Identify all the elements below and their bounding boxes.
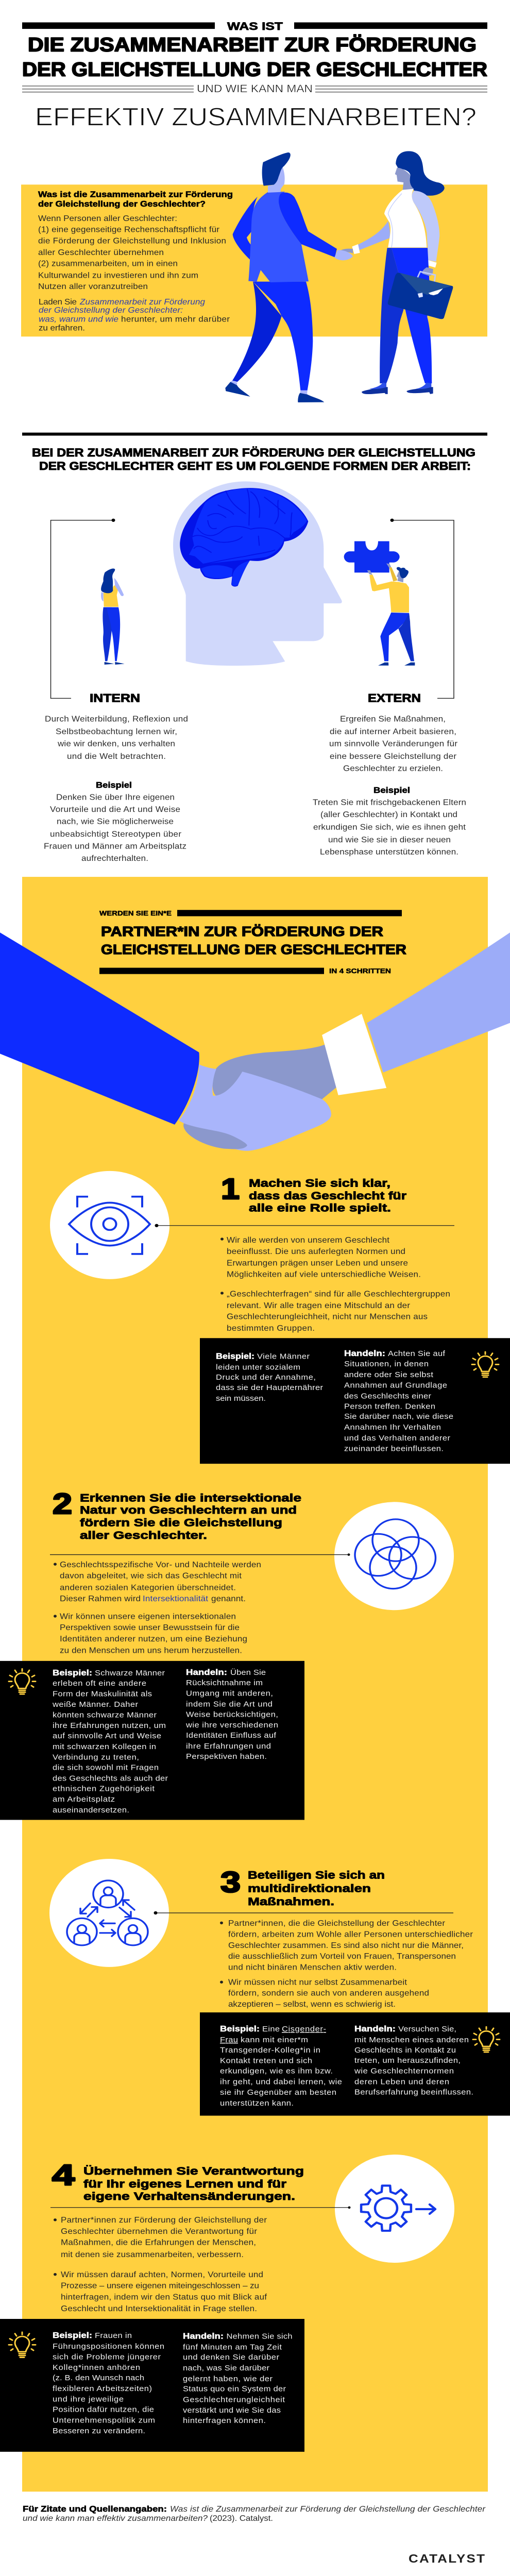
section heading: forms of work: DER GESCHLECHTER GEHT ES UM FOLGENDE FORMEN DER ARBEIT: — [39, 460, 471, 473]
step 3 heading: Beteiligen Sie sich an — [248, 1868, 385, 1881]
example text: Beispiel: — [220, 2025, 260, 2033]
extern example: und wie Sie sie in dieser neuen — [328, 836, 451, 844]
step 1 example box — [200, 1338, 510, 1464]
step 4 bullets — [54, 2216, 267, 2313]
action text: hinterfragen können. — [183, 2417, 266, 2425]
definition text: Wenn Personen aller Geschlechter: — [38, 214, 177, 223]
action text: ihre Erfahrungen und — [186, 1742, 271, 1751]
icon: eye in circle — [50, 1171, 169, 1279]
example text: Beispiel: — [53, 2331, 92, 2340]
example text: Form der Maskulinität als — [53, 1690, 152, 1698]
definition text — [38, 214, 226, 291]
icon: light bulb — [9, 2332, 36, 2358]
action text: Achten Sie auf — [388, 1350, 446, 1358]
example text: und ihre jeweilige — [53, 2395, 124, 2403]
example text: unterstützen kann. — [220, 2099, 294, 2108]
step 3 bullets: fördern, arbeiten zum Wohle aller Personen unterschiedlicher — [228, 1930, 473, 1939]
step 2 bullets: Dieser Rahmen wird — [60, 1595, 141, 1603]
example text: Beispiel: — [216, 1352, 254, 1361]
action text — [344, 1349, 453, 1453]
step 1 — [50, 1171, 510, 1464]
action text: Üben Sie — [230, 1668, 266, 1677]
title connector: und wie kann man: UND WIE KANN MAN — [197, 82, 313, 95]
step 3 example box — [200, 2012, 510, 2115]
definition text: (1) eine gegenseitige Rechenschaftspflicht für — [38, 225, 220, 234]
action text: gelernt haben, wie der — [183, 2375, 273, 2383]
example text: Schwarze Männer — [95, 1669, 165, 1677]
example text: mit schwarzen Kollegen in — [53, 1743, 156, 1751]
definition heading — [38, 190, 233, 209]
step 4 bullets: Partner*innen zur Förderung der Gleichstellung der — [61, 2216, 267, 2225]
citation: (2023). Catalyst. — [210, 2514, 273, 2523]
example text: ihre Erfahrungen nutzen, um — [53, 1722, 166, 1730]
action text: Handeln: — [354, 2025, 396, 2033]
step 4 bullets: Geschlechter übernehmen die Verantwortung für — [61, 2227, 258, 2236]
section heading: forms of work — [32, 446, 475, 473]
action text: und denken Sie darüber — [183, 2353, 279, 2362]
figure — [367, 563, 415, 666]
step 3 bullets: die ausschließlich zum Vorteil von Frauen, Transpersonen — [228, 1952, 456, 1961]
example text: sich die Probleme jüngerer — [53, 2353, 161, 2361]
action text: mit Menschen eines anderen — [354, 2036, 469, 2044]
example text: ethnischen Zugehörigkeit — [53, 1785, 155, 1793]
action text: des Geschlechts einer — [344, 1392, 431, 1400]
intern text: wie wir denken, uns verhalten — [57, 739, 175, 748]
example text: Viele Männer — [257, 1352, 310, 1361]
example text: könnten schwarze Männer — [53, 1711, 157, 1719]
action text: Versuchen Sie, — [398, 2025, 456, 2033]
illustration: head with brain — [173, 481, 342, 666]
action text: Status quo ein System der — [183, 2385, 286, 2393]
example text — [216, 1352, 323, 1403]
step 3 — [49, 1859, 510, 2115]
partner heading: GLEICHSTELLUNG DER GESCHLECHTER — [101, 942, 406, 958]
action text: Identitäten Einfluss auf — [186, 1732, 277, 1740]
example text: erleben oft eine andere — [53, 1679, 146, 1688]
example text: ihr geht, und dabei lernen, wie — [220, 2078, 342, 2086]
column: extern — [313, 692, 466, 856]
citation: und wie kann man effektiv zusammenarbeiten? — [23, 2514, 208, 2523]
step 4 bullets: Prozesse – unsere eigenen miteingeschlossen – zu — [61, 2281, 259, 2291]
example text: auseinandersetzen. — [53, 1806, 129, 1815]
action text: nach, was Sie darüber — [183, 2364, 269, 2372]
step 3 heading: multidirektionalen — [248, 1882, 371, 1894]
download note: herunter, um mehr darüber — [121, 315, 230, 324]
step 3 bullets: fördern, sondern sie auch von anderen ausgehend — [228, 1989, 429, 1997]
illustration: man lifting puzzle piece — [344, 541, 415, 666]
step 2 bullets: zu den Menschen um uns herum herzustellen. — [60, 1646, 242, 1655]
panel: four steps background — [22, 877, 488, 2492]
section heading: forms of work: BEI DER ZUSAMMENARBEIT ZUR FÖRDERUNG DER GLEICHSTELLUNG — [32, 446, 475, 460]
example text: auf sinnvolle Art und Weise — [53, 1732, 161, 1740]
brain — [180, 488, 308, 587]
example text: (z. B. den Wunsch nach — [53, 2374, 144, 2382]
action text — [354, 2025, 473, 2096]
intern text: und die Welt betrachten. — [67, 752, 166, 761]
example text: Position dafür nutzen, die — [53, 2405, 154, 2414]
extern text: um sinnvolle Veränderungen für — [329, 739, 458, 748]
step 2 bullets: Wir können unsere eigenen intersektionalen — [60, 1612, 236, 1621]
action text: Handeln: — [183, 2332, 224, 2341]
icon: gear with arrow — [335, 2155, 454, 2263]
definition text: (2) zusammenarbeiten, um in einen — [38, 259, 178, 268]
step 2 — [0, 1487, 454, 1820]
citation — [23, 2505, 486, 2523]
action text: Berufserfahrung beeinflussen. — [354, 2088, 473, 2096]
step 1 bullets: bestimmten Gruppen. — [227, 1324, 315, 1333]
step 2 bullets: davon abgeleitet, wie sich das Geschlecht mit — [60, 1571, 242, 1580]
example text: Kolleg*innen anhören — [53, 2364, 140, 2372]
step 2 heading — [80, 1491, 301, 1541]
example text — [53, 2331, 164, 2435]
extern example: (aller Geschlechter) in Kontakt und — [320, 810, 457, 819]
step 1 heading: Machen Sie sich klar, — [249, 1177, 390, 1189]
example text: Transgender-Kolleg*in in — [220, 2046, 320, 2055]
action text: indem Sie die Art und — [186, 1700, 273, 1708]
definition text: die Förderung der Gleichstellung und Inklusion — [38, 236, 226, 245]
step 1 heading — [249, 1177, 406, 1214]
extern example — [313, 786, 466, 856]
step 2 bullets: genannt. — [211, 1595, 246, 1603]
step 4 bullets: mit denen sie zusammenarbeiten, verbessern. — [61, 2250, 244, 2259]
action text: deren Leben und deren — [354, 2078, 449, 2086]
step 4 heading — [83, 2164, 304, 2202]
step 2 heading: Erkennen Sie die intersektionale — [80, 1491, 301, 1504]
action text: Annahmen auf Grundlage — [344, 1381, 447, 1389]
bracket: extern — [390, 519, 454, 698]
step 4 example box — [0, 2319, 304, 2452]
step 4 bullets: Maßnahmen, die die Erfahrungen der Menschen, — [61, 2238, 256, 2247]
step 2 bullets: Geschlechtsspezifische Vor- und Nachteile werden — [60, 1561, 261, 1569]
step 1 bullets: beeinflusst. Die uns auferlegten Normen und — [227, 1247, 405, 1256]
example text: weiße Männer. Daher — [52, 1701, 138, 1709]
partner heading: IN 4 SCHRITTEN — [329, 967, 391, 975]
step 1 heading: dass das Geschlecht für — [249, 1189, 406, 1202]
action text: andere oder Sie selbst — [344, 1370, 434, 1379]
intern example — [44, 781, 186, 863]
title line 3: EFFEKTIV ZUSAMMENARBEITEN? — [35, 103, 477, 131]
example text: sie ihr Gegenüber am besten — [220, 2089, 336, 2097]
action text: Umgang mit anderen, — [186, 1689, 273, 1698]
step 3 bullets: und nicht binären Menschen aktiv werden. — [228, 1963, 397, 1972]
step 1 bullets: relevant. Wir alle tragen eine Mitschuld an der — [227, 1301, 411, 1310]
extern example: Beispiel — [373, 786, 410, 795]
action text: Perspektiven haben. — [186, 1753, 267, 1761]
bracket: intern — [50, 519, 115, 698]
icon: overlapping circles — [334, 1502, 454, 1610]
step number 3: 3 — [220, 1866, 241, 1899]
intern text: Selbstbeobachtung lernen wir, — [56, 727, 177, 736]
action text: Annahmen Ihr Verhalten — [344, 1423, 441, 1432]
step 1 bullets: Erwartungen prägen unser Leben und unsere — [227, 1259, 408, 1267]
citation: Für Zitate und Quellenangaben: — [23, 2505, 167, 2514]
partner heading: WERDEN SIE EIN*E — [99, 909, 172, 917]
extern example: Treten Sie mit frischgebackenen Eltern — [313, 798, 466, 807]
extern text: Geschlechter zu erzielen. — [343, 764, 443, 773]
step 2 heading: aller Geschlechter. — [80, 1529, 207, 1541]
definition heading: der Gleichstellung der Geschlechter? — [38, 199, 206, 209]
step 4 bullets: hinterfragen, indem wir den Status quo mit Blick auf — [61, 2293, 267, 2301]
extern text: Ergreifen Sie Maßnahmen, — [340, 715, 446, 723]
example text: Frau — [220, 2036, 238, 2044]
icon: three people with arrows — [49, 1859, 169, 1967]
divider rule — [22, 433, 487, 436]
intern text — [45, 715, 188, 761]
action text — [185, 1668, 278, 1761]
step 1 bullets: „Geschlechterfragen“ sind für alle Geschlechtergruppen — [227, 1290, 450, 1298]
definition text: Nutzen aller voranzutreiben — [38, 282, 148, 291]
step number 4: 4 — [52, 2159, 75, 2191]
action text: Rücksichtnahme im — [186, 1679, 263, 1687]
step 3 bullets — [220, 1919, 473, 2009]
definition heading: Was ist die Zusammenarbeit zur Förderung — [38, 190, 233, 199]
example text: Führungspositionen können — [53, 2343, 164, 2351]
man — [225, 152, 353, 402]
step 4 heading: für Ihr eigenes Lernen und für — [83, 2177, 286, 2190]
step 2 bullets: Intersektionalität — [143, 1595, 209, 1603]
download note: Laden Sie — [39, 298, 77, 307]
action text: wie Geschlechternormen — [354, 2067, 454, 2075]
action text: Handeln: — [344, 1349, 385, 1358]
intern text: Durch Weiterbildung, Reflexion und — [45, 715, 188, 723]
example text: Eine — [262, 2025, 280, 2033]
intern heading: INTERN — [90, 692, 140, 705]
download note: der Gleichstellung der Geschlechter: — [39, 306, 183, 315]
step 1 bullets — [220, 1236, 450, 1333]
step 2 heading: Natur von Geschlechtern an und — [80, 1503, 297, 1516]
step 4 — [0, 2155, 454, 2452]
example text: flexibleren Arbeitszeiten) — [53, 2384, 152, 2393]
example text: sein müssen. — [216, 1395, 266, 1403]
step 1 bullets: Wir alle werden von unserem Geschlecht — [227, 1236, 390, 1245]
connector line — [154, 1911, 453, 1914]
action text: und das Verhalten anderer — [344, 1434, 450, 1443]
partner heading — [99, 909, 406, 975]
step 1 heading: alle eine Rolle spielt. — [249, 1201, 391, 1214]
action text: zueinander beeinflussen. — [344, 1445, 444, 1453]
extern example: erkundigen Sie sich, wie es ihnen geht — [313, 823, 466, 832]
intern example: unbeabsichtigt Stereotypen über — [50, 830, 182, 839]
example text: leiden unter sozialem — [216, 1363, 300, 1371]
panel: definition — [21, 184, 487, 336]
icon: light bulb — [472, 1352, 499, 1377]
step 2 bullets: Identitäten anderer nutzen, um eine Beziehung — [60, 1635, 247, 1643]
intern example: aufrechterhalten. — [81, 854, 148, 863]
briefcase — [388, 272, 453, 319]
example text: dass sie der Haupternährer — [216, 1384, 323, 1392]
example text: Beispiel: — [53, 1669, 92, 1677]
extern text — [329, 715, 458, 773]
logo: catalyst: CATALYST — [409, 2552, 485, 2565]
action text: Geschlechterungleichheit — [183, 2396, 285, 2404]
step 4 heading: Übernehmen Sie Verantwortung — [83, 2164, 304, 2177]
column: intern — [44, 692, 188, 863]
step 2 bullets: anderen sozialen Kategorien überschneidet. — [60, 1583, 236, 1592]
citation: Was ist die Zusammenarbeit zur Förderung der Gleichstellung der Geschlechter — [170, 2505, 486, 2514]
action text: Person treffen. Denken — [344, 1402, 435, 1411]
title line 2: DER GLEICHSTELLUNG DER GESCHLECHTER — [22, 59, 487, 80]
step 4 bullets: Geschlecht und Intersektionalität in Frage stellen. — [61, 2304, 257, 2313]
step 1 bullets: Möglichkeiten auf viele unterschiedliche Weisen. — [227, 1270, 421, 1279]
action text: verstärkt und wie Sie das — [183, 2406, 281, 2415]
example text: Besseren zu verändern. — [53, 2427, 145, 2435]
action text: wie ihre verschiedenen — [185, 1721, 278, 1730]
title block — [22, 20, 487, 131]
example text: kann mit einer*m — [241, 2036, 308, 2044]
download note: Zusammenarbeit zur Förderung — [79, 298, 205, 307]
step 2 example box — [0, 1661, 304, 1820]
title line 1: DIE ZUSAMMENARBEIT ZUR FÖRDERUNG — [28, 33, 477, 56]
step 3 heading: Maßnahmen. — [248, 1895, 334, 1908]
action text: fünf Minuten am Tag Zeit — [183, 2343, 282, 2351]
step 3 bullets: Wir müssen nicht nur selbst Zusammenarbeit — [228, 1978, 407, 1987]
connector line — [155, 1224, 454, 1227]
step 4 heading: eigene Verhaltensänderungen. — [83, 2190, 295, 2202]
example text: Frauen in — [95, 2332, 132, 2340]
download note — [39, 298, 230, 332]
action text: Geschlechts in Kontakt zu — [354, 2046, 456, 2055]
example text: erkundigen, wie es ihm bzw. — [220, 2067, 333, 2075]
step 2 heading: fördern Sie die Gleichstellung — [80, 1516, 282, 1529]
example text: Druck und der Annahme, — [216, 1374, 316, 1382]
connector line — [50, 2206, 350, 2209]
example text: die sich sowohl mit Fragen — [53, 1764, 159, 1772]
illustration: large handshake — [0, 933, 510, 1151]
extern heading: EXTERN — [368, 692, 421, 705]
title kicker: was ist: WAS IST — [227, 20, 283, 32]
step number 2: 2 — [53, 1487, 72, 1520]
step 3 bullets: Geschlechter zusammen. Es sind also nicht nur die Männer, — [228, 1941, 464, 1950]
example text: am Arbeitsplatz — [53, 1795, 115, 1804]
definition text: aller Geschlechter übernehmen — [38, 248, 164, 257]
step 4 bullets: Wir müssen darauf achten, Normen, Vorurteile und — [61, 2270, 263, 2279]
extern example: Lebensphase unterstützen können. — [320, 848, 458, 856]
icon: light bulb — [9, 1669, 36, 1694]
icon: light bulb — [473, 2027, 500, 2052]
example text — [52, 1669, 168, 1815]
action text: Nehmen Sie sich — [227, 2332, 293, 2341]
action text: treten, um herauszufinden, — [354, 2056, 461, 2065]
illustration: two people shaking hands — [225, 151, 453, 402]
intern example: Denken Sie über Ihre eigenen — [56, 793, 175, 802]
action text: Weise berücksichtigen, — [186, 1710, 278, 1719]
action text: Sie darüber nach, wie diese — [344, 1413, 453, 1421]
download note: was, warum und wie — [39, 315, 118, 324]
step number 1: 1 — [221, 1173, 240, 1206]
example text: Verbindung zu treten, — [53, 1753, 139, 1761]
woman — [352, 151, 453, 394]
action text: Handeln: — [186, 1668, 227, 1677]
illustration: woman thinking — [101, 569, 125, 665]
step 2 bullets — [54, 1561, 261, 1655]
extern text: eine bessere Gleichstellung der — [330, 752, 457, 761]
example text — [220, 2025, 342, 2108]
step 2 bullets: Perspektiven sowie unser Bewusstsein für die — [60, 1623, 240, 1632]
action text — [183, 2332, 293, 2425]
definition text: Kulturwandel zu investieren und ihn zum — [38, 271, 198, 280]
step 3 heading — [248, 1868, 385, 1908]
download note: zu erfahren. — [39, 324, 85, 332]
step 1 bullets: Geschlechterungleichheit, nicht nur Menschen aus — [227, 1312, 428, 1321]
example text: Cisgender- — [282, 2025, 326, 2033]
step 3 bullets: akzeptieren – selbst, wenn es schwierig ist. — [228, 2000, 396, 2009]
extern text: die auf interner Arbeit basieren, — [330, 727, 456, 736]
step 3 bullets: Partner*innen, die die Gleichstellung der Geschlechter — [228, 1919, 446, 1928]
partner heading: PARTNER*IN ZUR FÖRDERUNG DER — [101, 923, 383, 940]
head silhouette — [173, 481, 342, 666]
action text: Situationen, in denen — [344, 1360, 429, 1368]
intern example: Vorurteile und die Art und Weise — [50, 805, 180, 814]
example text: des Geschlechts als auch der — [53, 1774, 168, 1783]
intern example: Frauen und Männer am Arbeitsplatz — [44, 842, 186, 851]
puzzle piece — [344, 541, 400, 572]
intern example: Beispiel — [96, 781, 132, 790]
example text: Unternehmenspolitik zum — [53, 2416, 155, 2425]
intern example: nach, wie Sie möglicherweise — [57, 817, 174, 826]
connector line — [50, 1553, 350, 1556]
example text: Kontakt treten und sich — [220, 2057, 312, 2065]
